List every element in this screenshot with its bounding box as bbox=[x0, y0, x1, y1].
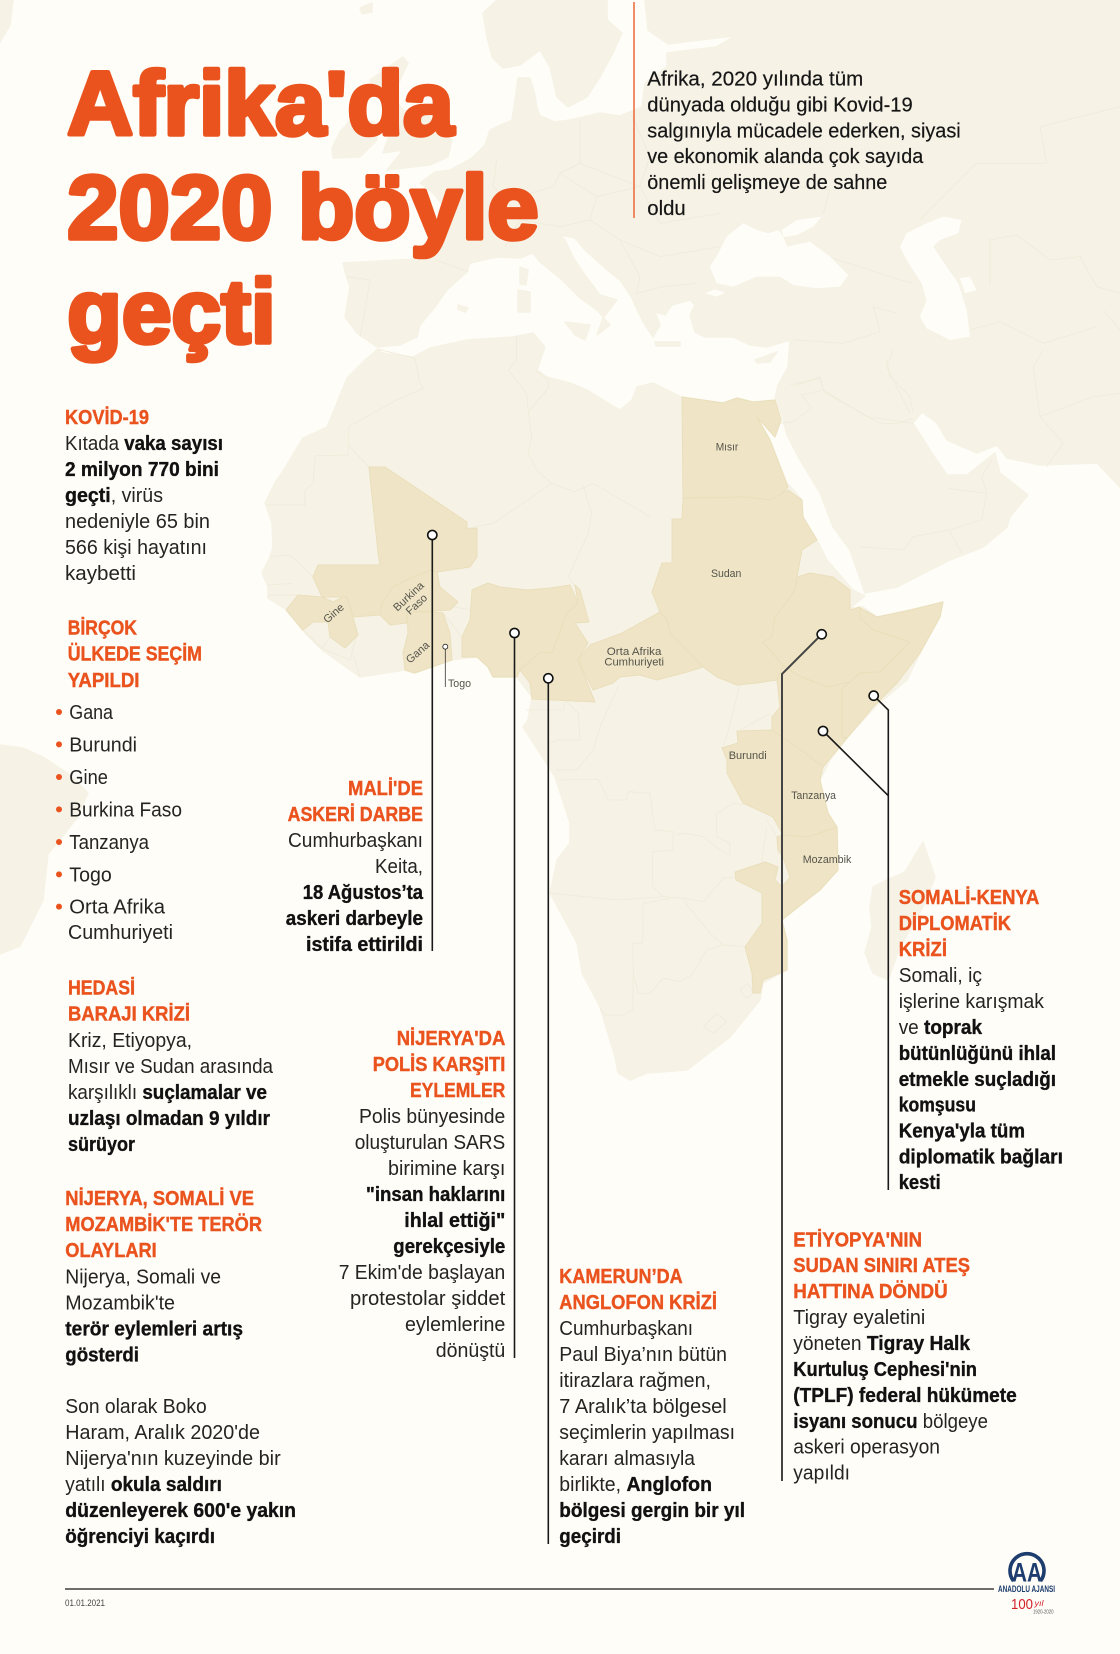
land: South America bbox=[0, 745, 88, 954]
text block: Nigeria protests: birimine karşı bbox=[388, 1158, 505, 1180]
text block: Ethiopia bbox=[793, 1228, 1017, 1485]
text block: Nigeria protests: protestolar şiddet bbox=[350, 1288, 506, 1310]
text block: Somalia-Kenya bbox=[899, 886, 1063, 1194]
election country list bbox=[56, 702, 182, 944]
text block: terror incidents: Nijerya'nın kuzeyinde bir bbox=[65, 1448, 281, 1470]
text block: Somalia-Kenya: bütünlüğünü ihlal bbox=[899, 1043, 1056, 1065]
text block: terror incidents: düzenleyerek 600'e yakın bbox=[65, 1500, 296, 1522]
text block: Ethiopia: SUDAN SINIRI ATEŞ bbox=[793, 1255, 970, 1277]
land: Iceland bbox=[360, 3, 372, 14]
text block: Hedasi Dam bbox=[68, 977, 274, 1156]
intro divider line bbox=[633, 2, 635, 218]
text block: Nigeria protests: dönüştü bbox=[436, 1340, 505, 1362]
election country list: Togo bbox=[69, 864, 112, 886]
label: Tanzanya: Tanzanya bbox=[791, 790, 837, 802]
leader: Somalia and Kenya bbox=[818, 691, 888, 1190]
text block: Nigeria protests: NİJERYA'DA bbox=[397, 1027, 505, 1050]
text block: Somalia-Kenya: etmekle suçladığı bbox=[899, 1069, 1056, 1091]
text block: Hedasi Dam: sürüyor bbox=[68, 1134, 135, 1156]
text block: Somalia-Kenya: Kenya'yla tüm bbox=[899, 1121, 1025, 1143]
text block: terror incidents: NİJERYA, SOMALİ VE bbox=[65, 1187, 254, 1210]
election country list: Burkina Faso bbox=[69, 799, 182, 821]
text block: terror incidents: Son olarak Boko bbox=[65, 1396, 207, 1418]
highlighted country: Sudan and South Sudan bbox=[652, 490, 817, 685]
text block: Ethiopia: HATTINA DÖNDÜ bbox=[793, 1280, 948, 1303]
logo: Anadolu Ajansı bbox=[998, 1554, 1055, 1616]
text block: elections: YAPILDI bbox=[68, 670, 140, 692]
text block: Cameroon: 7 Aralık’ta bölgesel bbox=[559, 1396, 727, 1418]
label: Gine: Gine bbox=[321, 602, 347, 626]
footer rule and date: 01.01.2021 bbox=[65, 1598, 105, 1608]
text block: Cameroon: itirazlara rağmen, bbox=[559, 1370, 711, 1392]
text block: terror incidents: Haram, Aralık 2020'de bbox=[65, 1422, 260, 1444]
country borders: Europe bbox=[347, 115, 720, 337]
country borders: Central Asia and Turkey bbox=[793, 107, 1120, 467]
land: Madagascar bbox=[865, 842, 935, 980]
text block: Nigeria protests: oluşturulan SARS bbox=[355, 1132, 505, 1154]
text block: terror incidents bbox=[65, 1187, 296, 1548]
text block: Somalia-Kenya: SOMALİ-KENYA bbox=[899, 886, 1039, 909]
text block: terror incidents: Mozambik'te bbox=[65, 1292, 175, 1314]
text block: Somalia-Kenya: ve toprak bbox=[899, 1017, 983, 1039]
highlighted country: Ghana and Togo bbox=[403, 612, 452, 673]
text block: terror incidents: OLAYLARI bbox=[65, 1240, 157, 1262]
land: Corsica and Sardinia bbox=[518, 267, 530, 312]
intro text: dünyada olduğu gibi Kovid-19 bbox=[647, 94, 913, 116]
intro text: salgınıyla mücadele ederken, siyasi bbox=[647, 120, 961, 142]
highlighted country: Somalia bbox=[842, 602, 943, 738]
land: Eurasia bbox=[343, 0, 1120, 593]
land: Great Britain bbox=[370, 57, 452, 170]
label: Orta Afrika Cumhuriyeti bbox=[604, 646, 664, 668]
text block: Ethiopia: ETİYOPYA'NIN bbox=[793, 1228, 922, 1252]
election country list: Cumhuriyeti bbox=[68, 922, 173, 944]
text block: Cameroon: Cumhurbaşkanı bbox=[559, 1318, 693, 1340]
highlighted country: Burkina Faso bbox=[380, 570, 458, 625]
text block: Cameroon: Paul Biya’nın bütün bbox=[559, 1344, 727, 1366]
election country list: Tanzanya bbox=[69, 832, 150, 854]
text block: Somalia-Kenya: işlerine karışmak bbox=[899, 991, 1045, 1013]
intro text: Afrika, 2020 yılında tüm bbox=[647, 68, 863, 90]
text block: terror incidents: öğrenciyi kaçırdı bbox=[65, 1526, 215, 1548]
text block: terror incidents: gösterdi bbox=[65, 1344, 139, 1366]
highlighted country: Mozambique bbox=[735, 827, 838, 993]
text block: Ethiopia: (TPLF) federal hükümete bbox=[793, 1385, 1017, 1407]
text block: Mali coup bbox=[286, 777, 424, 956]
text block: Cameroon: KAMERUN’DA bbox=[559, 1266, 683, 1288]
text block: Cameroon: geçirdi bbox=[559, 1526, 621, 1548]
highlighted country: Cameroon bbox=[520, 585, 595, 702]
Black Sea, Azov, Caspian and Aral bbox=[705, 217, 977, 340]
highlighted country: Ethiopia bbox=[763, 573, 910, 687]
label: Orta Afrika Cumhuriyeti: Orta Afrika bbox=[607, 646, 662, 658]
text block: Ethiopia: askeri operasyon bbox=[793, 1437, 940, 1459]
text block: Hedasi Dam: BARAJI KRİZİ bbox=[68, 1003, 190, 1026]
text block: Nigeria protests bbox=[339, 1027, 506, 1362]
text block: Cameroon: seçimlerin yapılması bbox=[559, 1422, 735, 1444]
election country list: Gine bbox=[69, 767, 108, 789]
text block: Cameroon: birlikte, Anglofon bbox=[559, 1474, 712, 1496]
intro text: önemli gelişmeye de sahne bbox=[647, 172, 887, 194]
text block: Mali coup: istifa ettirildi bbox=[306, 934, 423, 956]
land: Ireland bbox=[332, 117, 377, 158]
country borders: Middle East bbox=[780, 360, 992, 553]
title bbox=[67, 55, 539, 363]
text block: Hedasi Dam: HEDASİ bbox=[68, 977, 135, 1000]
title: 2020 böyle bbox=[67, 159, 539, 259]
text block: Hedasi Dam: Kriz, Etiyopya, bbox=[68, 1030, 192, 1052]
label: Burkina Faso: Burkina bbox=[391, 579, 427, 614]
text block: Cameroon: bölgesi gergin bir yıl bbox=[559, 1500, 745, 1522]
text block: terror incidents: MOZAMBİK'TE TERÖR bbox=[65, 1213, 262, 1236]
text block: Mali coup: ASKERİ DARBE bbox=[288, 803, 423, 826]
icon: AA arc bbox=[1010, 1554, 1044, 1581]
text block: Ethiopia: yöneten Tigray Halk bbox=[793, 1333, 971, 1355]
intro text: oldu bbox=[647, 198, 686, 220]
text block: Mali coup: askeri darbeyle bbox=[286, 908, 423, 930]
intro text: ve ekonomik alanda çok sayıda bbox=[647, 146, 924, 168]
text block: Ethiopia: yapıldı bbox=[793, 1463, 850, 1485]
text block: Kovid-19: KOVİD-19 bbox=[65, 406, 149, 429]
text block: Nigeria protests: "insan haklarını bbox=[366, 1184, 505, 1206]
text block: Kovid-19: Kıtada vaka sayısı bbox=[65, 433, 223, 455]
land: Greenland edge bbox=[0, 0, 13, 42]
text block: Somalia-Kenya: diplomatik bağları bbox=[899, 1146, 1063, 1168]
text block: Mali coup: Keita, bbox=[375, 856, 423, 878]
text block: Hedasi Dam: Mısır ve Sudan arasında bbox=[68, 1056, 274, 1078]
text block: Kovid-19 bbox=[65, 406, 223, 585]
title: Afrika'da bbox=[67, 55, 455, 155]
logo 100 years bbox=[1011, 1596, 1054, 1616]
text block: Nigeria protests: 7 Ekim'de başlayan bbox=[339, 1262, 505, 1284]
logo 100 years: 1920-2020 bbox=[1033, 1610, 1054, 1616]
text block: elections: ÜLKEDE SEÇİM bbox=[68, 643, 202, 666]
text block: Hedasi Dam: karşılıklı suçlamalar ve bbox=[68, 1082, 267, 1104]
highlighted country: Kenya bbox=[772, 665, 850, 767]
land: Sicily, Crete, Cyprus, Balearics bbox=[458, 305, 777, 363]
highlighted country: Central African Republic bbox=[578, 612, 703, 690]
text block: Mali coup: 18 Ağustos’ta bbox=[303, 882, 424, 904]
text block: terror incidents: terör eylemleri artış bbox=[65, 1318, 243, 1340]
map labels bbox=[321, 442, 852, 866]
text block: Somalia-Kenya: komşusu bbox=[899, 1095, 976, 1117]
highlighted country: Guinea bbox=[286, 595, 358, 648]
label: Gana: Gana bbox=[404, 639, 433, 666]
leader: Nigeria bbox=[510, 628, 519, 1358]
text block: Mali coup: Cumhurbaşkanı bbox=[288, 830, 423, 852]
text block: Mali coup: MALİ'DE bbox=[348, 777, 423, 800]
text block: elections bbox=[56, 617, 202, 944]
text block: Somalia-Kenya: kesti bbox=[899, 1172, 941, 1194]
text block: Somalia-Kenya: Somali, iç bbox=[899, 965, 982, 987]
highlighted country: Tanzania and Burundi bbox=[722, 730, 837, 837]
text block: Nigeria protests: ihlal ettiği" bbox=[404, 1210, 505, 1232]
country borders: central and southern Africa bbox=[527, 683, 778, 1033]
label: Orta Afrika Cumhuriyeti: Cumhuriyeti bbox=[604, 656, 664, 668]
land: Scandinavia bbox=[483, 0, 622, 107]
leader: Cameroon bbox=[544, 674, 553, 1544]
text block: Somalia-Kenya: KRİZİ bbox=[899, 938, 947, 961]
text block: Cameroon: kararı almasıyla bbox=[559, 1448, 696, 1470]
text block: terror incidents: Nijerya, Somali ve bbox=[65, 1266, 221, 1288]
highlighted country: Mali bbox=[313, 467, 477, 617]
text block: Kovid-19: nedeniyle 65 bin bbox=[65, 511, 210, 533]
text block: Kovid-19: kaybetti bbox=[65, 563, 136, 585]
label: Sudan: Sudan bbox=[711, 568, 741, 580]
text block: Kovid-19: 566 kişi hayatını bbox=[65, 537, 207, 559]
election country list: Orta Afrika bbox=[69, 897, 166, 919]
logo 100 years: yıl bbox=[1033, 1599, 1044, 1608]
land: Africa bbox=[262, 333, 943, 1080]
logo 100 years: 100 bbox=[1011, 1596, 1033, 1613]
text block: Somalia-Kenya: DİPLOMATİK bbox=[899, 912, 1012, 935]
text block: Nigeria protests: POLİS KARŞITI bbox=[373, 1053, 505, 1076]
text block: terror incidents: yatılı okula saldırı bbox=[65, 1474, 222, 1496]
logo letters AA: AA bbox=[1012, 1558, 1042, 1588]
text block: Kovid-19: 2 milyon 770 bini bbox=[65, 459, 219, 481]
highlighted country: Egypt bbox=[682, 397, 788, 500]
leader: Ethiopia bbox=[782, 630, 826, 1481]
text block: Ethiopia: Tigray eyaletini bbox=[793, 1307, 925, 1329]
label: Burundi: Burundi bbox=[729, 750, 767, 762]
text block: Nigeria protests: EYLEMLER bbox=[410, 1080, 506, 1102]
label: Burkina Faso: Faso bbox=[404, 592, 430, 618]
election country list: Gana bbox=[69, 702, 114, 724]
leader: Mali bbox=[428, 530, 437, 951]
text block: Ethiopia: Kurtuluş Cephesi'nin bbox=[793, 1359, 977, 1381]
text block: Nigeria protests: Polis bünyesinde bbox=[359, 1106, 505, 1128]
leader lines and map pins bbox=[428, 2, 888, 1544]
election country list: Burundi bbox=[69, 734, 137, 756]
text block: Nigeria protests: eylemlerine bbox=[405, 1314, 505, 1336]
title: geçti bbox=[67, 263, 276, 363]
text block: Cameroon bbox=[559, 1266, 745, 1548]
logo wordmark: ANADOLU AJANSI bbox=[998, 1584, 1055, 1594]
label: Togo with marker bbox=[443, 644, 471, 690]
text block: Kovid-19: geçti, virüs bbox=[65, 485, 163, 507]
label: Mısır: Mısır bbox=[716, 442, 739, 454]
label: Togo with marker: Togo bbox=[448, 678, 471, 690]
intro text bbox=[647, 68, 961, 220]
highlighted country: Nigeria bbox=[462, 583, 578, 677]
label: Mozambik: Mozambik bbox=[803, 854, 852, 866]
country borders: northwest and west Africa bbox=[266, 337, 650, 677]
text block: Ethiopia: isyanı sonucu bölgeye bbox=[793, 1411, 988, 1433]
map of Africa, Europe and Middle East bbox=[0, 0, 1120, 1080]
text block: Cameroon: ANGLOFON KRİZİ bbox=[559, 1291, 717, 1314]
text block: Nigeria protests: gerekçesiyle bbox=[393, 1236, 505, 1258]
text block: Hedasi Dam: uzlaşı olmadan 9 yıldır bbox=[68, 1108, 270, 1130]
text block: elections: BİRÇOK bbox=[68, 617, 137, 640]
